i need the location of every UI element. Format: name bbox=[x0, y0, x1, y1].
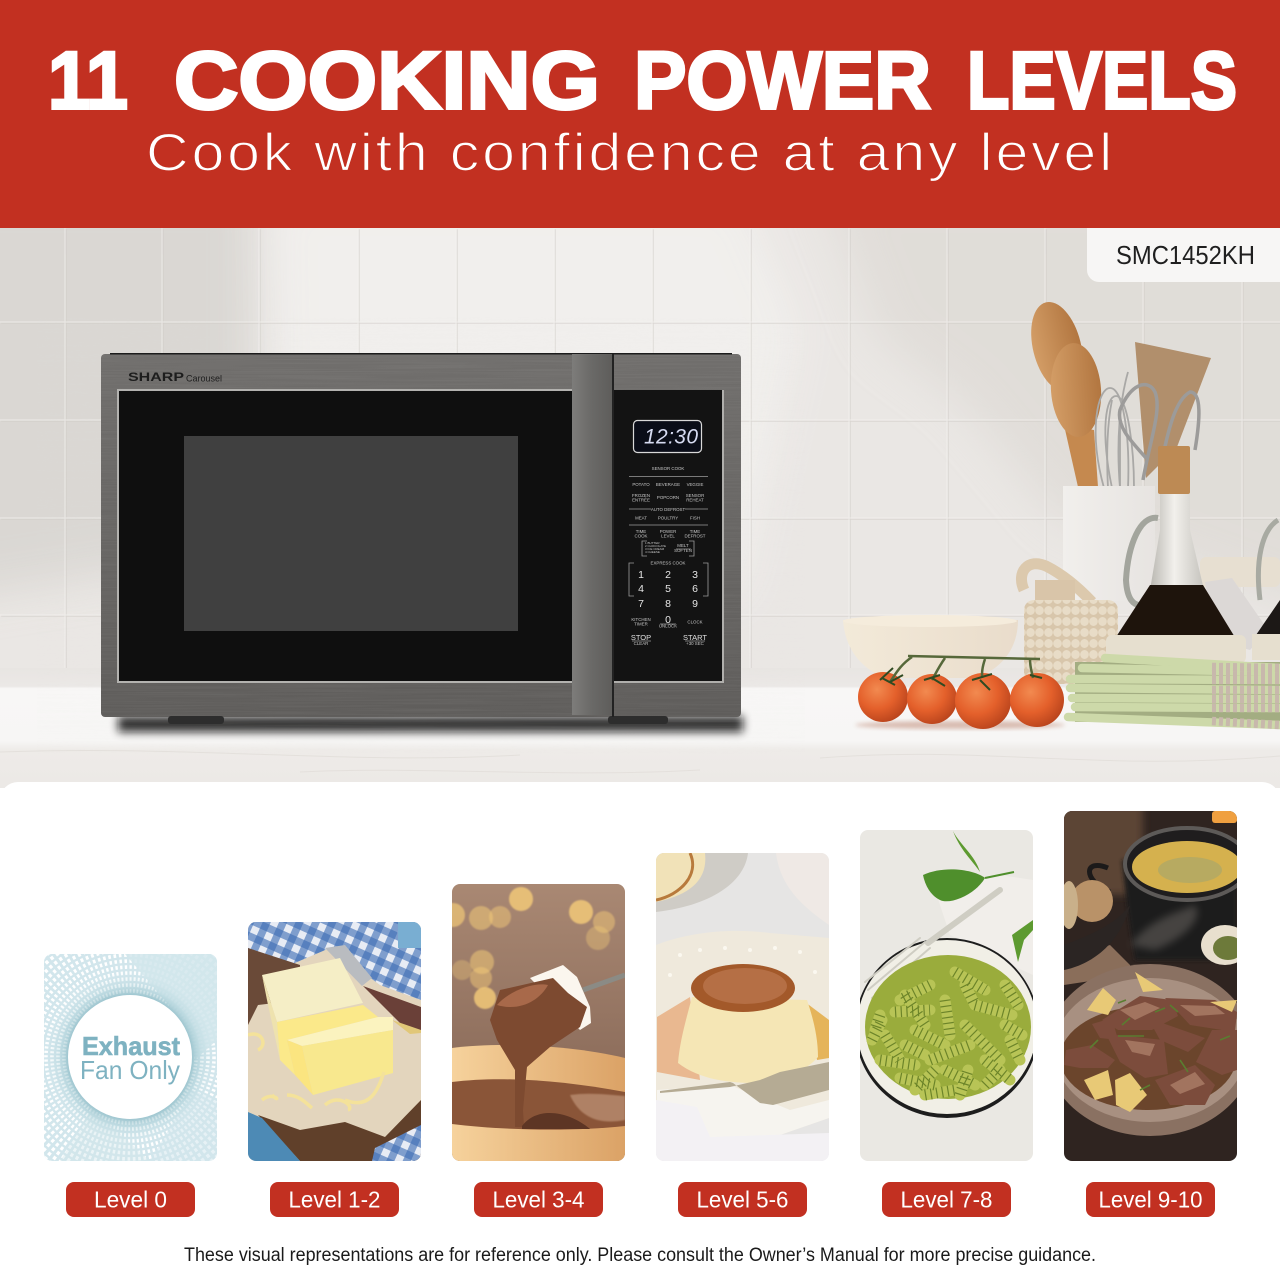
steam bbox=[1130, 905, 1197, 950]
image: flan bbox=[656, 853, 829, 1161]
panel button labels: DEFROST bbox=[685, 534, 706, 538]
panel button labels: ENTRÉE bbox=[632, 498, 650, 502]
panel button labels: FROZEN bbox=[632, 493, 650, 498]
wooden spoon back bbox=[1031, 302, 1082, 386]
potato chunks bbox=[1084, 972, 1237, 1112]
level 5-6 pill bbox=[678, 1182, 807, 1217]
wooden spoon front bbox=[1050, 343, 1102, 486]
panel button labels: UNLOCK bbox=[659, 624, 677, 628]
model label bbox=[1087, 228, 1280, 282]
fork bbox=[865, 890, 1000, 998]
panel button labels: VEGGIE bbox=[687, 482, 703, 487]
fan only label: Fan Only bbox=[80, 1055, 180, 1085]
panel: level 9-10 bbox=[1046, 805, 1254, 1217]
keypad numbers: 6 bbox=[692, 583, 698, 595]
lace plate corner bbox=[776, 853, 829, 925]
control panel: 1 BUTTER bbox=[645, 541, 660, 545]
title: 11 bbox=[48, 36, 128, 126]
utensils in crock bbox=[1023, 297, 1211, 601]
tomato 1 bbox=[858, 672, 908, 722]
keypad numbers: 1 bbox=[638, 569, 644, 581]
control panel: 4 CHEESE bbox=[645, 550, 660, 554]
bowl bbox=[452, 1045, 625, 1161]
panel button labels: SENSOR bbox=[686, 493, 704, 498]
level 9-10 pill: Level 9-10 bbox=[1098, 1186, 1202, 1212]
white plate front bbox=[657, 1085, 829, 1142]
tomato 4 bbox=[1010, 673, 1064, 727]
butter curls bbox=[248, 1034, 384, 1110]
panel button labels: POPCORN bbox=[657, 495, 679, 500]
white levels card bbox=[0, 782, 1280, 1280]
panel button labels: FISH bbox=[690, 516, 700, 520]
panel: level 1-2 bbox=[248, 922, 421, 1217]
panel button labels: +30 SEC bbox=[686, 641, 704, 646]
asparagus bbox=[1068, 658, 1280, 725]
image: exhaust fan graphic bbox=[0, 919, 268, 1195]
stew plate bbox=[1046, 964, 1254, 1136]
image: butter bbox=[248, 922, 421, 1161]
caramel sauce bbox=[657, 997, 700, 1080]
pasta pile bbox=[865, 955, 1031, 1099]
panel button labels bbox=[631, 466, 706, 646]
scissors handles bbox=[1119, 385, 1199, 480]
brand logo: SHARP bbox=[128, 370, 184, 384]
spoon bbox=[583, 975, 625, 990]
gingham cloth bbox=[248, 922, 421, 1000]
beef chunks bbox=[1064, 996, 1237, 1105]
microwave bbox=[101, 353, 741, 724]
keypad numbers: 7 bbox=[638, 598, 644, 610]
pot bbox=[1090, 828, 1249, 960]
chocolate coating bbox=[490, 978, 587, 1127]
panel button labels: TIME bbox=[636, 529, 646, 534]
panel button labels: LEVEL bbox=[661, 534, 675, 538]
panel button labels: EXPRESS COOK bbox=[651, 560, 686, 566]
keypad numbers: 4 bbox=[638, 583, 644, 595]
control panel: STOP bbox=[631, 633, 651, 642]
panel button labels: POULTRY bbox=[658, 516, 678, 520]
panel button labels: COOK bbox=[635, 534, 648, 538]
oil bottle bbox=[1106, 446, 1246, 663]
door window bbox=[117, 389, 573, 683]
panel button labels: REHEAT bbox=[686, 498, 704, 502]
panel button labels: CLEAR bbox=[634, 641, 648, 646]
control panel: 2 CHOCOLATE bbox=[645, 544, 666, 548]
panel button labels: POWER bbox=[660, 529, 676, 534]
small side dish bbox=[1201, 925, 1249, 965]
background plate bbox=[656, 853, 748, 912]
title: COOKING bbox=[174, 36, 600, 126]
level 3-4 pill bbox=[474, 1182, 603, 1217]
brick background bbox=[1058, 805, 1143, 895]
image: marshmallow in chocolate bbox=[441, 884, 625, 1161]
back ceramic dish bbox=[1200, 557, 1280, 587]
control panel bbox=[614, 390, 724, 683]
cork bbox=[1158, 446, 1190, 494]
napkin bbox=[935, 875, 1033, 975]
plate bbox=[855, 938, 1039, 1118]
control panel: 3 ICE CREAM bbox=[645, 547, 665, 551]
feet bbox=[168, 716, 224, 724]
disclaimer footnote: These visual representations are for reference only. Please consult the Owner’s Manual for more precise guidance. bbox=[184, 1245, 1096, 1266]
level 9-10 pill bbox=[1086, 1182, 1215, 1217]
keypad numbers: 5 bbox=[665, 583, 671, 595]
fan centre circle bbox=[68, 995, 192, 1119]
whisk bbox=[1096, 372, 1134, 488]
panel button labels: TIME bbox=[690, 529, 700, 534]
counter top bbox=[0, 668, 1280, 788]
keypad numbers: 2 bbox=[665, 569, 671, 581]
image: beef stew bbox=[1046, 805, 1254, 1161]
title: POWER bbox=[634, 36, 931, 126]
keypad numbers: 8 bbox=[665, 598, 671, 610]
bowl bbox=[843, 615, 1018, 678]
keypad numbers: 0 bbox=[665, 614, 671, 626]
table bbox=[248, 1112, 300, 1161]
image: pesto pasta bbox=[855, 830, 1039, 1161]
clock display bbox=[634, 420, 702, 452]
wood board bbox=[248, 948, 300, 1025]
melted chocolate bbox=[452, 1079, 625, 1130]
tiled wall bbox=[0, 228, 1280, 668]
bokeh lights bbox=[441, 887, 615, 1009]
level 0 pill: Level 0 bbox=[94, 1186, 167, 1212]
subtitle: Cook with confidence at any level bbox=[146, 124, 1115, 182]
level 7-8 pill: Level 7-8 bbox=[900, 1186, 992, 1212]
vine bbox=[890, 656, 1040, 682]
keypad numbers bbox=[638, 569, 698, 626]
exhaust label: Exhaust bbox=[82, 1031, 180, 1061]
panel button labels: BEVERAGE bbox=[656, 482, 680, 487]
panel: level 7-8 bbox=[855, 830, 1039, 1217]
basil bbox=[923, 831, 1033, 962]
gingham corner bbox=[372, 1125, 421, 1161]
white cloth bbox=[656, 1100, 829, 1161]
bottle handle bbox=[1126, 518, 1158, 605]
panel button labels: SOFTEN bbox=[674, 548, 692, 553]
panel button labels: MEAT bbox=[635, 516, 647, 520]
level 5-6 pill: Level 5-6 bbox=[696, 1186, 788, 1212]
level 7-8 pill bbox=[882, 1182, 1011, 1217]
keypad numbers: 3 bbox=[692, 569, 698, 581]
level 0 pill bbox=[66, 1182, 195, 1217]
herbs bbox=[1090, 1000, 1230, 1090]
panel: level 0 bbox=[0, 919, 268, 1217]
keypad numbers: 9 bbox=[692, 598, 698, 610]
rope basket bbox=[1021, 564, 1118, 684]
panel button labels: KITCHEN bbox=[631, 617, 651, 622]
second bottle edge bbox=[1252, 520, 1280, 660]
level 1-2 pill bbox=[270, 1182, 399, 1217]
tomato 2 bbox=[907, 674, 957, 724]
door handle bbox=[572, 354, 612, 715]
flan body bbox=[678, 997, 818, 1083]
spatula bbox=[1135, 342, 1211, 478]
caramel top bbox=[691, 964, 795, 1012]
oil bbox=[1117, 585, 1234, 635]
white crock bbox=[1063, 486, 1155, 601]
tomatoes on vine bbox=[855, 656, 1065, 729]
beef highlights bbox=[1120, 1002, 1225, 1094]
level 3-4 pill: Level 3-4 bbox=[492, 1186, 584, 1212]
table bbox=[1064, 945, 1130, 985]
knife bbox=[325, 945, 372, 986]
mesh screen bbox=[184, 436, 518, 631]
microwave shadow bbox=[118, 716, 743, 732]
panel button labels: CLOCK bbox=[687, 620, 703, 624]
red header banner bbox=[0, 0, 1280, 228]
woven base bbox=[1106, 635, 1246, 663]
flame bbox=[1212, 811, 1237, 823]
brand logo bbox=[128, 372, 222, 382]
title: LEVELS bbox=[967, 36, 1237, 126]
tomato 3 bbox=[955, 673, 1011, 729]
panel button labels: MELT bbox=[677, 543, 689, 548]
tea towel bbox=[1205, 578, 1268, 650]
brand logo: Carousel bbox=[186, 374, 222, 384]
potatoes in dish bbox=[1060, 880, 1130, 970]
clock display: 12:30 bbox=[644, 426, 698, 448]
panel: level 3-4 bbox=[441, 884, 625, 1217]
panel button labels: SENSOR COOK bbox=[652, 466, 684, 471]
panel: level 5-6 bbox=[656, 853, 829, 1217]
panel button labels: TIMER bbox=[634, 622, 648, 626]
control panel: START bbox=[683, 633, 707, 642]
lace plate bbox=[656, 931, 829, 1142]
spoon bbox=[660, 1062, 829, 1105]
level 1-2 pill: Level 1-2 bbox=[288, 1186, 380, 1212]
kitchen scene bbox=[0, 180, 1280, 788]
glass body bbox=[1150, 494, 1203, 585]
marshmallow bbox=[530, 965, 591, 1030]
panel button labels: POTATO bbox=[632, 482, 650, 487]
model label: SMC1452KH bbox=[1116, 242, 1255, 270]
panel button labels: AUTO DEFROST bbox=[651, 507, 685, 512]
butter block bbox=[262, 958, 393, 1095]
